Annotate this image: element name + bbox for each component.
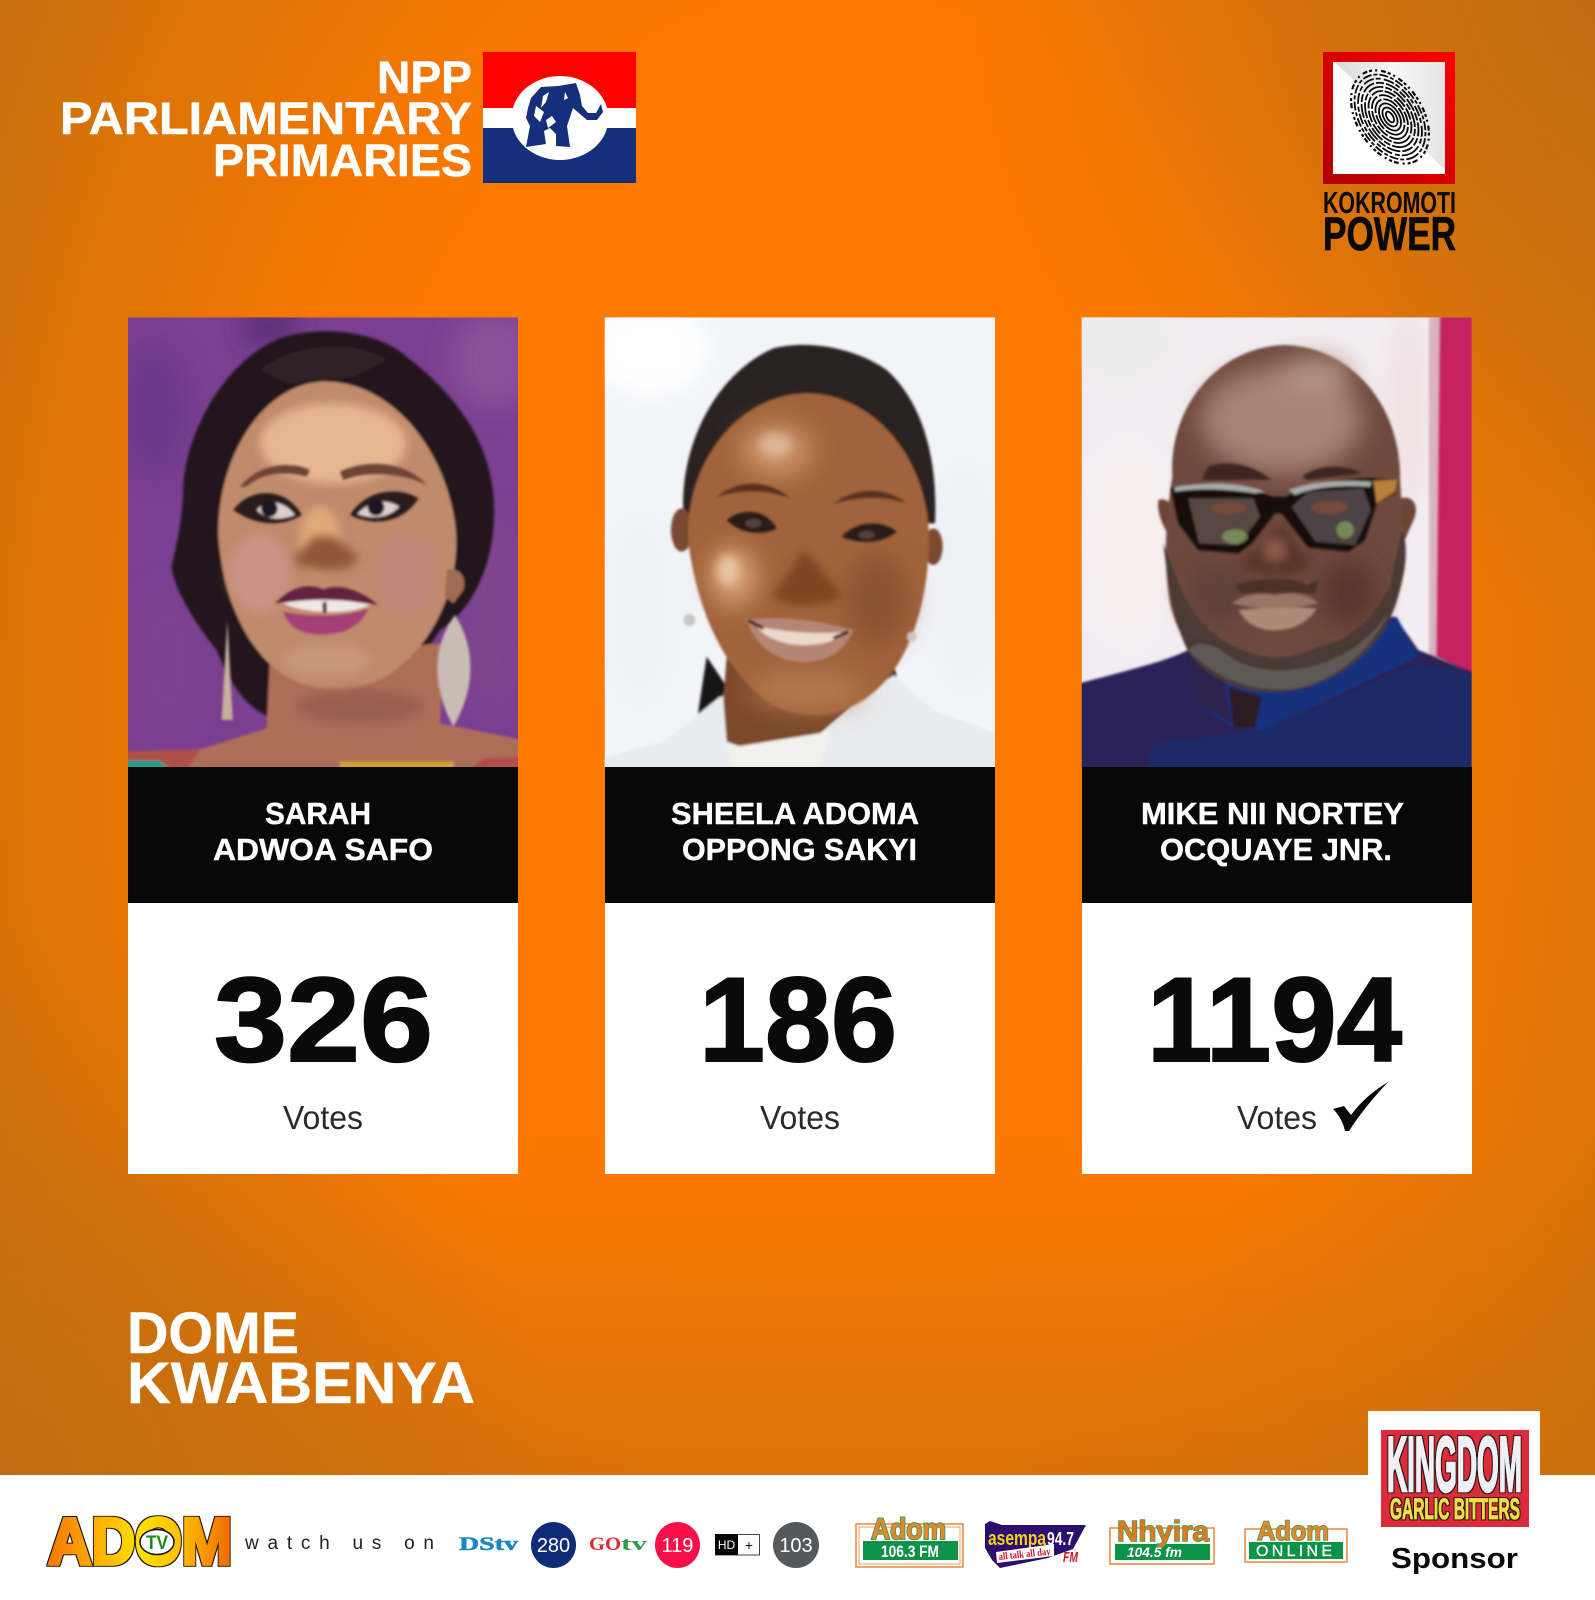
sponsor: Kingdom Garlic Bitters: Sponsor [1391,1543,1518,1575]
sponsor: Kingdom Garlic Bitters [1368,1411,1540,1600]
name: Sarah Adwoa Safo: ADWOA SAFO [213,833,433,867]
logo: Adom TV: TV [146,1533,168,1554]
logo: HD+ channel 103 [715,1522,819,1568]
label: votes: Votes [760,1099,840,1136]
logo: Adom Online: ONLINE [1256,1543,1332,1560]
logo: Asempa 94.7 FM: FM [1063,1549,1078,1566]
icon: Kokromoti Power fingerprint logo: KOKROMOTI [1323,186,1456,220]
vote count: 326: 326 [214,953,433,1087]
logo: GOtv channel 119: tv [621,1534,648,1555]
constituency label: Dome Kwabenya: KWABENYA [127,1351,475,1416]
logo: Adom TV: ADOM [48,1504,232,1578]
name: Mike Nii Nortey Ocquaye Jnr.: MIKE NII NORTEY [1141,797,1404,831]
logo: Nhyira 104.5 FM: Nhyira [1117,1516,1210,1548]
icon: Kokromoti Power fingerprint logo [1323,52,1456,260]
logo: HD+ channel 103: + [745,1537,753,1553]
name: Sheela Adoma Oppong Sakyi: OPPONG SAKYI [682,833,917,867]
logo: HD+ channel 103: 103 [779,1535,813,1557]
label: votes: Votes [1237,1099,1317,1136]
panel: candidate Mike Nii Nortey Ocquaye Jnr. [1082,317,1472,1174]
photo: Mike Nii Nortey Ocquaye Jnr. [1058,303,1492,783]
logo: Asempa 94.7 FM: all talk all day [998,1547,1052,1563]
logo: Asempa 94.7 FM: asempa [988,1528,1047,1550]
logo: GOtv channel 119: GO [589,1534,621,1555]
name: Sheela Adoma Oppong Sakyi: SHEELA ADOMA [671,797,919,831]
name: Sarah Adwoa Safo: SARAH [265,797,371,831]
logo: Nhyira 104.5 FM [1110,1516,1214,1564]
title: NPP Parliamentary Primaries: NPP [377,52,472,103]
icon: winner check mark [1333,1082,1388,1131]
label: votes: Votes [283,1099,363,1136]
logo: Asempa 94.7 FM [985,1521,1086,1568]
vote count: 1194: 1194 [1147,953,1402,1087]
logo: Asempa 94.7 FM: 94.7 [1047,1529,1074,1549]
vote count box [128,903,518,1174]
logo: Nhyira 104.5 FM: 104.5 fm [1127,1544,1182,1560]
icon: NPP flag with elephant [483,52,636,183]
title: NPP Parliamentary Primaries: PARLIAMENTARY [60,93,472,144]
constituency label: Dome Kwabenya [127,1301,475,1416]
vote count box [605,903,995,1174]
logo: DStv channel 280: DStv [459,1534,519,1555]
title: NPP Parliamentary Primaries [60,52,472,186]
name bar [1082,767,1472,903]
panel: candidate Sarah Adwoa Safo [128,317,518,1174]
logo: Adom 106.3 FM: 106.3 FM [881,1542,939,1561]
logo: GOtv channel 119 [589,1522,700,1568]
name bar [605,767,995,903]
name bar [128,767,518,903]
logo: DStv channel 280 [459,1522,576,1568]
panel: candidate Sheela Adoma Oppong Sakyi [587,303,1013,1174]
text: watch us on: watch us on [244,1533,434,1554]
logo: Adom Online [1245,1516,1347,1562]
photo: Sheela Adoma Oppong Sakyi [604,317,995,768]
logo: Adom 106.3 FM [856,1513,963,1567]
vote count: 186: 186 [699,953,897,1087]
name: Sarah Adwoa Safo [213,797,433,867]
vote count box [1082,903,1472,1174]
constituency label: Dome Kwabenya: DOME [127,1301,299,1366]
logo: GOtv channel 119: 119 [662,1535,693,1557]
logo: HD+ channel 103: HD [718,1538,735,1552]
title: NPP Parliamentary Primaries: PRIMARIES [213,135,472,186]
logo: Adom Online: Adom [1257,1516,1329,1546]
name: Mike Nii Nortey Ocquaye Jnr. [1141,797,1404,867]
icon: Kokromoti Power fingerprint logo: POWER [1323,207,1456,260]
logo: DStv channel 280: 280 [537,1535,570,1557]
name: Mike Nii Nortey Ocquaye Jnr.: OCQUAYE JNR. [1160,833,1392,867]
name: Sheela Adoma Oppong Sakyi [671,797,919,867]
logo: Adom 106.3 FM: Adom [871,1513,946,1546]
photo: Sarah Adwoa Safo [128,317,518,767]
footer band [0,1475,1595,1600]
